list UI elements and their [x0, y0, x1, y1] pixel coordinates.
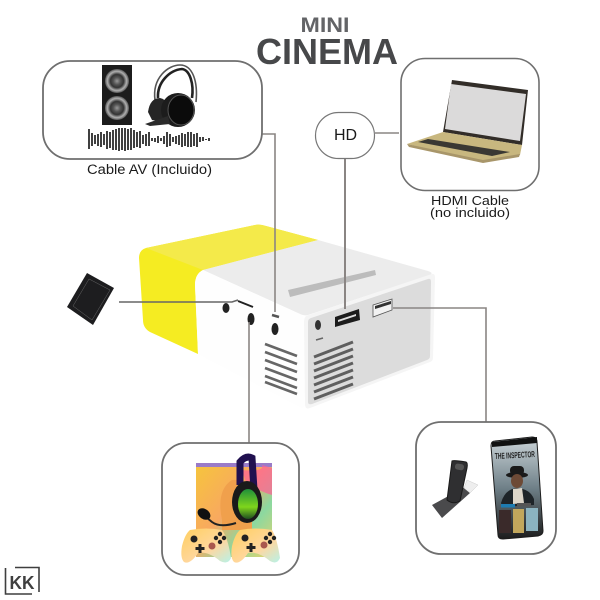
- projector yellow top: [146, 225, 318, 270]
- audio jack rear: [315, 320, 321, 330]
- label: Cable AV: Cable AV (Incluido): [87, 162, 212, 177]
- phone movie title: THE INSPECTOR: [495, 449, 535, 461]
- projector rear panel: [308, 279, 431, 404]
- panel: USB and phone: [416, 422, 556, 554]
- icon: laptop: [407, 80, 528, 163]
- HD badge: HD: [334, 127, 357, 144]
- console box: [196, 464, 272, 557]
- logo: KK: KK: [10, 573, 34, 593]
- phone buttons: [501, 504, 515, 508]
- title: CINEMA: [256, 31, 398, 72]
- icon: controller right: [231, 528, 280, 563]
- projector top face: [203, 240, 432, 315]
- icon: headset: [195, 457, 262, 525]
- label: HDMI cable: HDMI Cable: [431, 193, 509, 208]
- side vent: [265, 344, 297, 394]
- side ports: [222, 303, 230, 313]
- projector side face: [195, 270, 305, 408]
- icon: SD card: [67, 273, 114, 325]
- hdmi port: [335, 309, 360, 327]
- projector: [139, 225, 435, 408]
- projector yellow body: [139, 225, 318, 354]
- projector rear face: [304, 274, 435, 408]
- side logo strip: [288, 270, 376, 297]
- icon: headphones: [145, 65, 196, 127]
- panel: laptop: [401, 58, 539, 220]
- panel: AV cable: [43, 61, 262, 177]
- panel: consoles: [162, 443, 299, 575]
- panel: laptop: (no incluido): [430, 205, 510, 220]
- rear vent: [314, 342, 353, 399]
- icon: controller left: [181, 528, 231, 563]
- micro usb mark: [316, 338, 323, 340]
- icon: sound wave: [89, 128, 209, 151]
- icon: USB stick: [432, 461, 478, 518]
- HD badge: [316, 112, 374, 158]
- phone portrait: [506, 472, 528, 478]
- connector lines: [119, 133, 486, 443]
- title: MINI: [300, 14, 350, 37]
- icon: speaker: [102, 65, 132, 125]
- phone thumbnails: [499, 510, 511, 533]
- usb port: [373, 299, 392, 317]
- logo: KK: [6, 568, 39, 594]
